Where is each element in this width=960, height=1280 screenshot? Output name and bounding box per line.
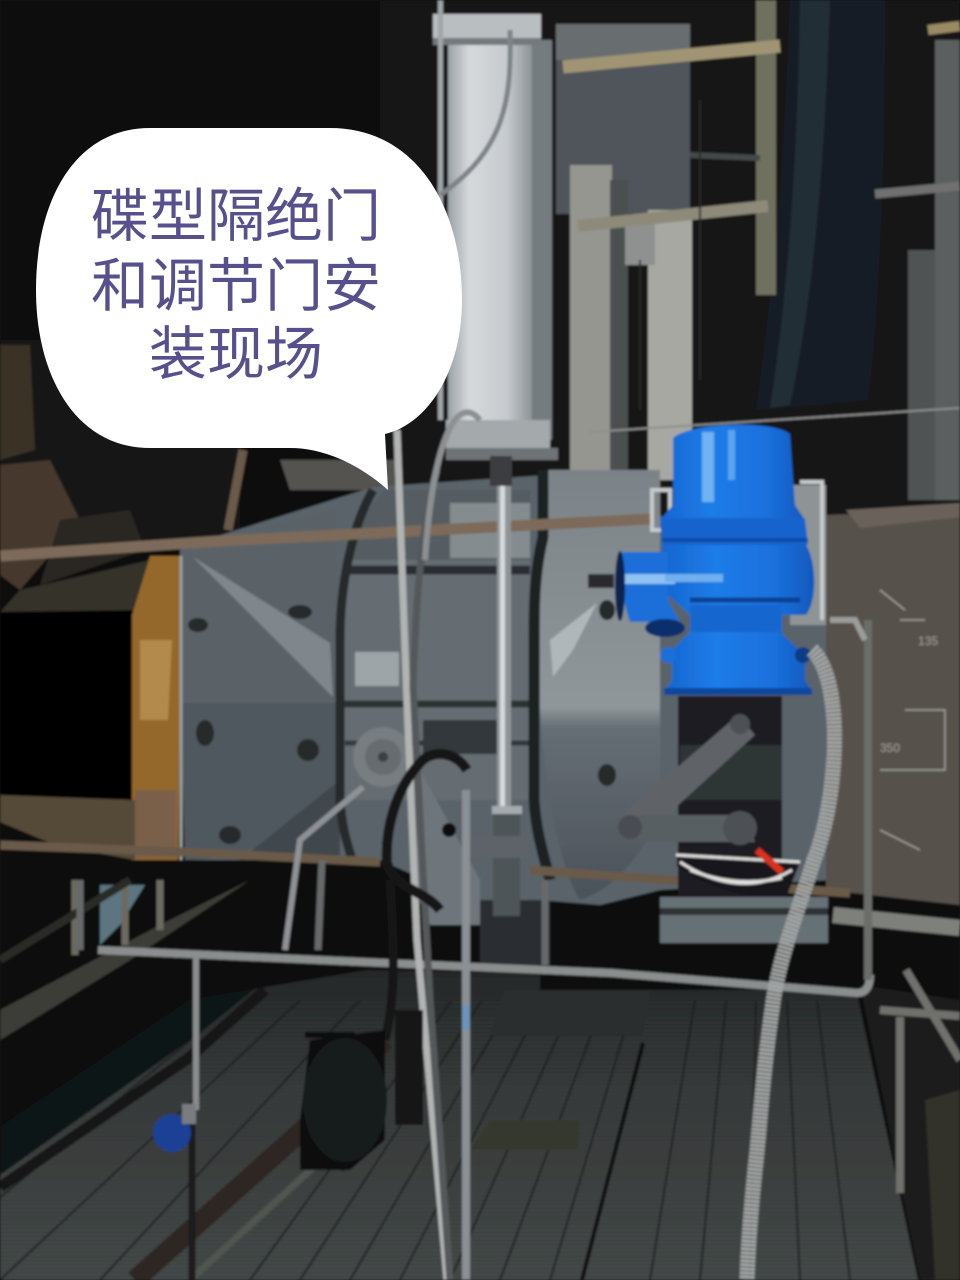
cylinder base and rotary linkage bbox=[353, 720, 530, 925]
area under damper bbox=[480, 890, 860, 990]
actuator flange bbox=[660, 518, 808, 545]
actuator mid body with right boss bbox=[662, 545, 814, 615]
blue electric actuator bbox=[588, 425, 814, 695]
floor grating bbox=[0, 953, 960, 1280]
horizontal scaffold pipes across duct bbox=[0, 519, 960, 1193]
rusty flange on the left of duct bbox=[0, 556, 182, 860]
left rusty steel structure bbox=[0, 345, 395, 612]
right side steel wall: 350 bbox=[880, 741, 900, 755]
background: concrete hopper and columns bbox=[556, 0, 960, 500]
actuator waist and lower body bbox=[690, 605, 782, 640]
flexible conduits bbox=[285, 412, 865, 1280]
caption text bbox=[91, 184, 381, 387]
actuator top cover bbox=[660, 425, 805, 520]
duct: isolation gate body bbox=[180, 470, 830, 905]
right side steel wall bbox=[826, 503, 960, 905]
lower left railing and light patch bbox=[0, 880, 250, 1040]
speech bubble callout bbox=[36, 128, 462, 490]
caption text: 碟型隔绝门 bbox=[91, 184, 381, 249]
caption text: 装现场 bbox=[149, 322, 323, 387]
actuator side boss bbox=[621, 552, 680, 622]
pneumatic cylinder bbox=[433, 0, 558, 806]
background: scaffold pipes bbox=[563, 26, 960, 432]
cable reel bbox=[300, 1010, 423, 1170]
right side steel wall: 135 bbox=[918, 634, 938, 648]
caption text: 和调节门安 bbox=[91, 254, 381, 319]
bolts on the duct bbox=[188, 600, 616, 844]
damper lever arm and position dial bbox=[618, 696, 828, 943]
water valve with blue handwheel bbox=[153, 957, 196, 1280]
floor right margin bbox=[860, 985, 960, 1280]
